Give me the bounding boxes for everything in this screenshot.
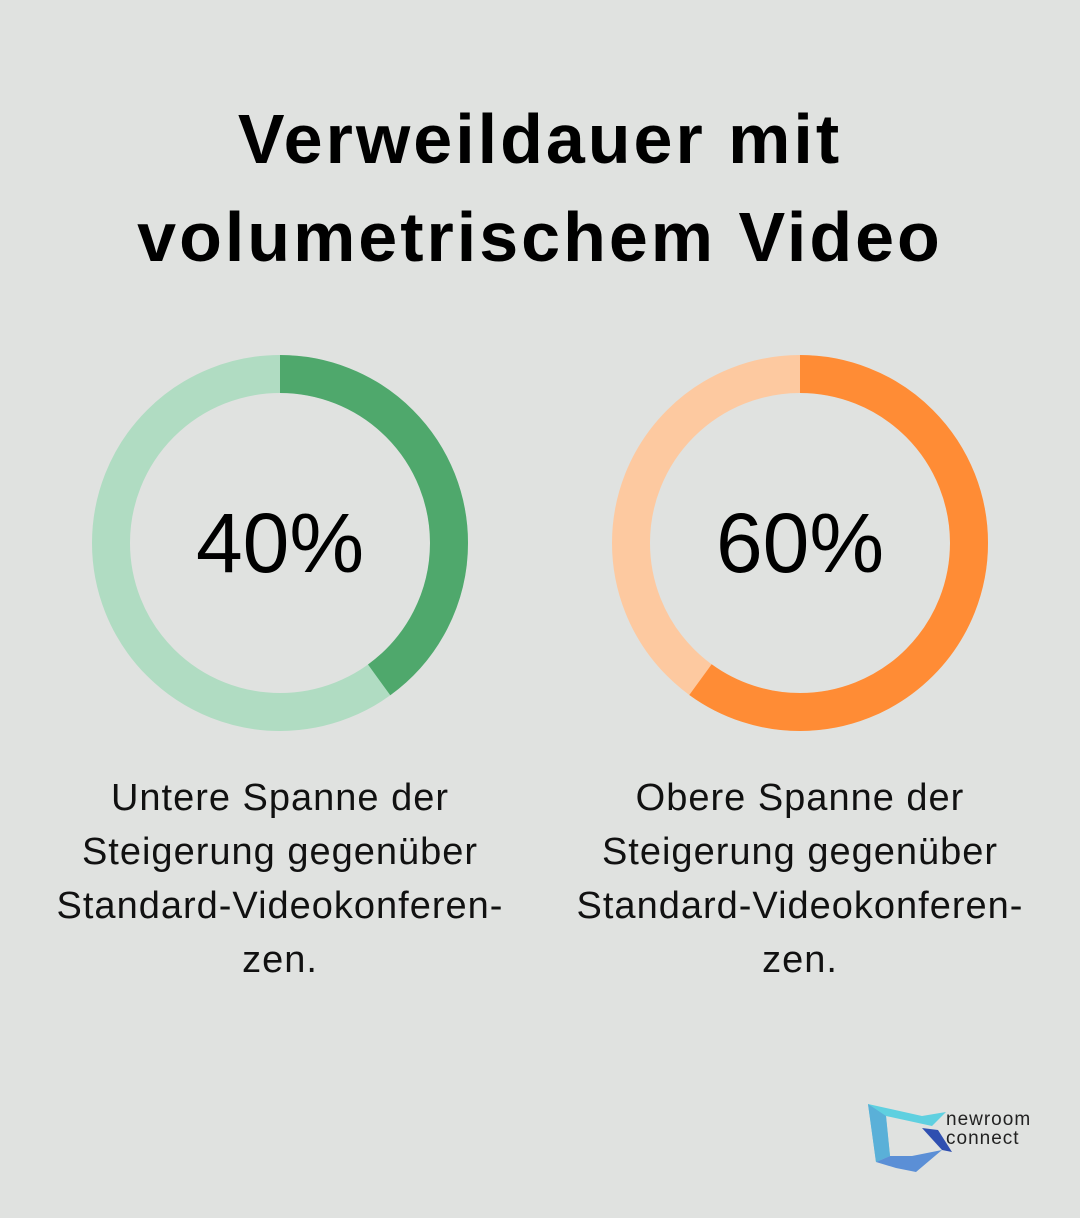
chart: right donut 60% — [612, 355, 988, 731]
caption right — [577, 777, 1023, 981]
title: volumetrischem Video — [137, 198, 943, 276]
caption left: Steigerung gegenüber — [82, 831, 478, 873]
caption right: zen. — [762, 939, 838, 981]
title — [137, 100, 943, 276]
caption right: Standard-Videokonferen- — [577, 885, 1023, 927]
title: Verweildauer mit — [238, 100, 842, 178]
caption left — [57, 777, 503, 981]
logo — [868, 1104, 1031, 1172]
chart: right donut 60%: 60% — [716, 496, 884, 590]
caption right: Steigerung gegenüber — [602, 831, 998, 873]
logo: newroom — [946, 1109, 1031, 1130]
logo: connect — [946, 1128, 1020, 1149]
chart: left donut 40%: 40% — [196, 496, 364, 590]
caption left: zen. — [242, 939, 318, 981]
caption right: Obere Spanne der — [636, 777, 964, 819]
chart: left donut 40% — [92, 355, 468, 731]
caption left: Untere Spanne der — [111, 777, 449, 819]
caption left: Standard-Videokonferen- — [57, 885, 503, 927]
